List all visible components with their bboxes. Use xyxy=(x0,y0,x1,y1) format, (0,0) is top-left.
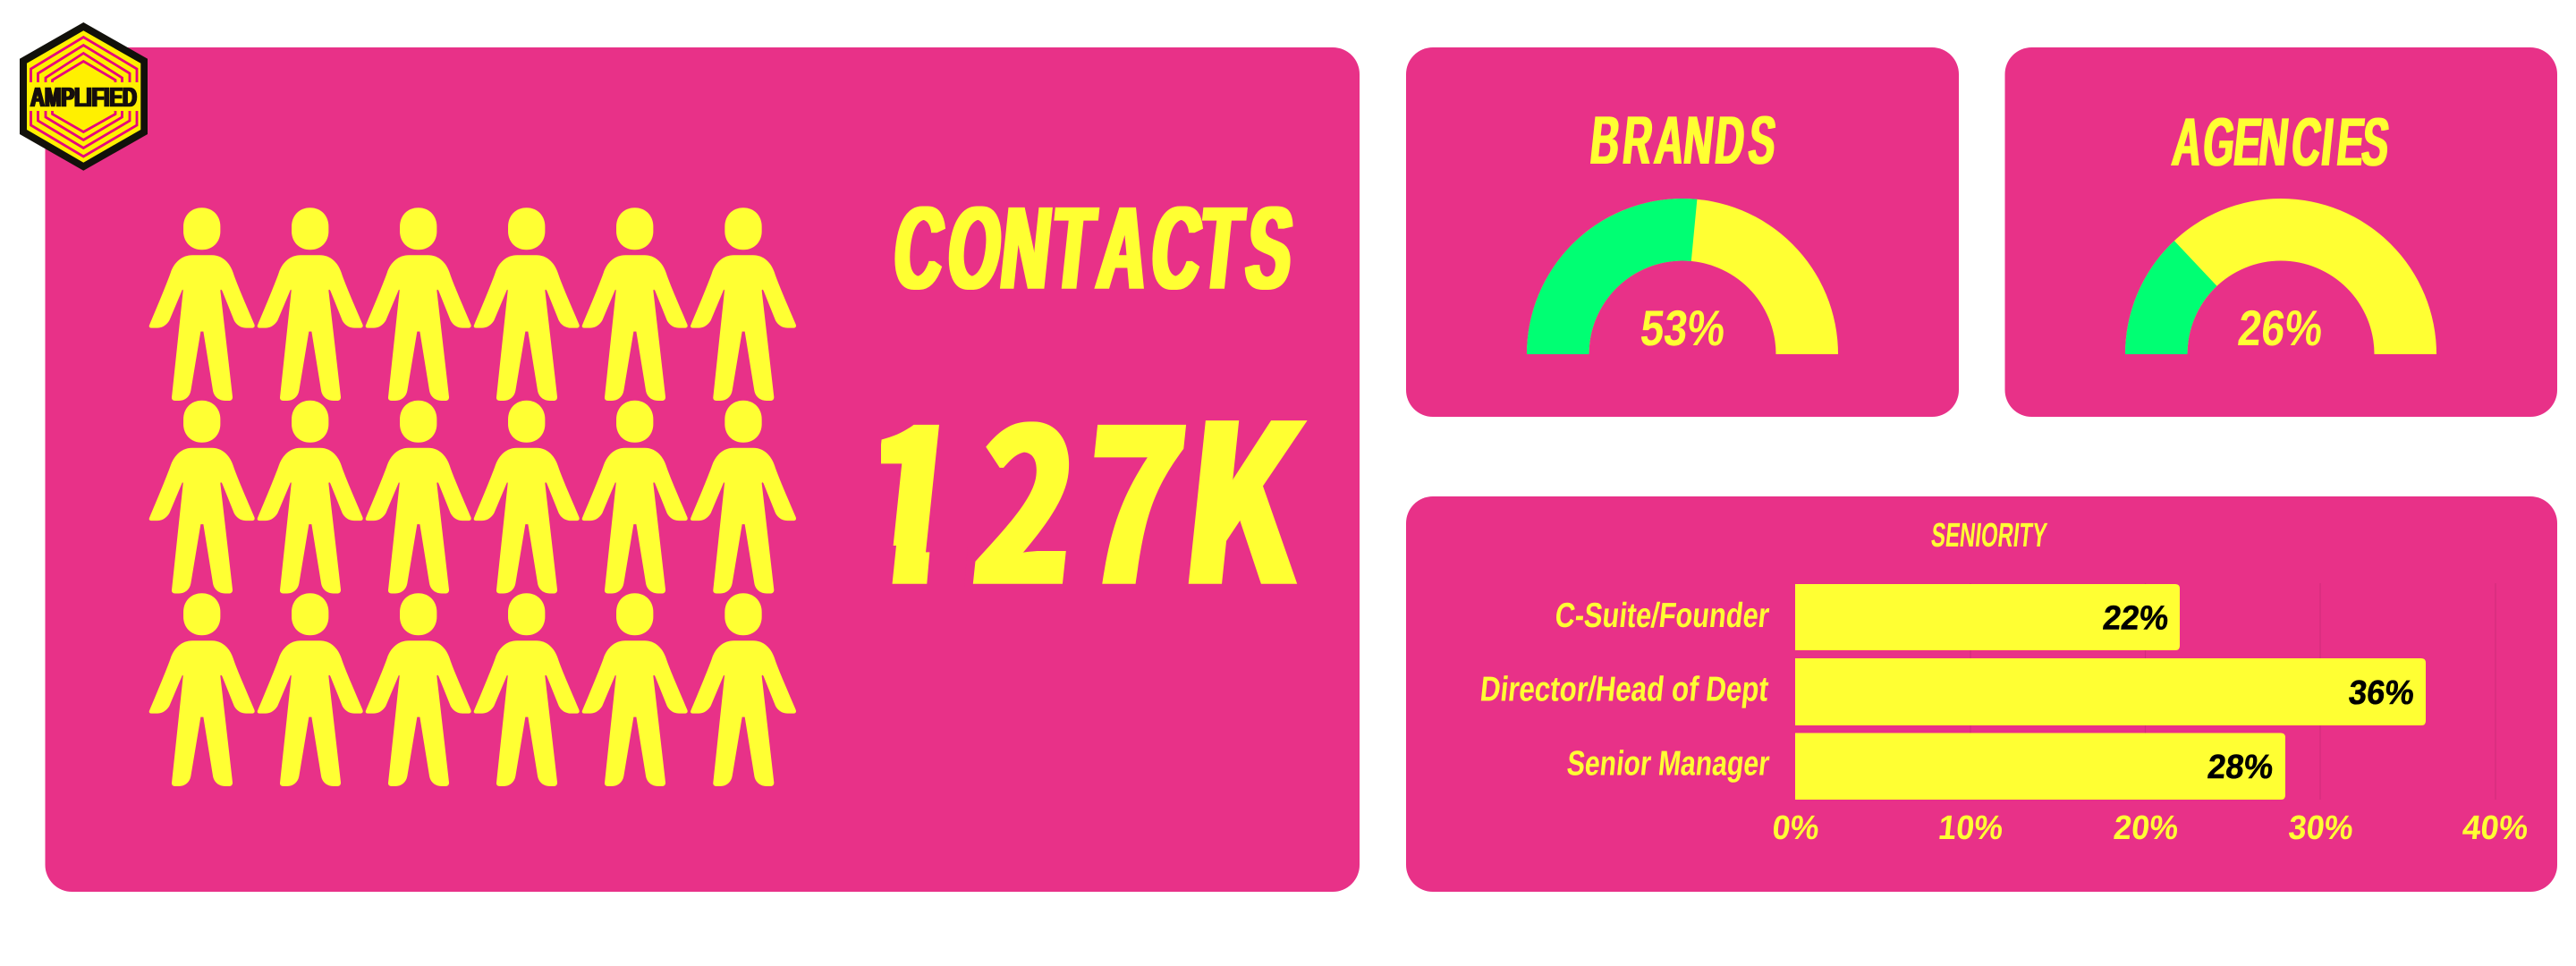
gauge: agencies 26% xyxy=(2125,199,2436,354)
axis tick labels xyxy=(1770,809,2529,847)
panel: agencies xyxy=(2005,47,2557,417)
bar: director 36% xyxy=(1795,658,2426,725)
value label: 36%: 36% xyxy=(2347,674,2416,712)
axis tick labels: 10% xyxy=(1936,809,2004,847)
bar: senior manager 28% xyxy=(1795,733,2285,800)
panel background xyxy=(1406,47,1959,417)
panel background xyxy=(45,47,1360,892)
gauge: brands 53% xyxy=(1527,199,1838,354)
gauge value: 53%: 53% xyxy=(1638,300,1728,356)
category label: c-suite: C-Suite/Founder xyxy=(1554,597,1771,635)
category label: senior manager: Senior Manager xyxy=(1565,745,1771,783)
bar: c-suite 22% xyxy=(1795,584,2180,650)
badge inner hexagon xyxy=(27,30,140,163)
axis tick labels: 0% xyxy=(1770,809,1821,847)
panel: seniority xyxy=(1406,496,2557,892)
badge outer hexagon xyxy=(20,22,148,171)
heading: agencies: AGENCIES xyxy=(2169,105,2393,181)
panel background xyxy=(2005,47,2557,417)
axis tick labels: 20% xyxy=(2112,809,2180,847)
gauge value: 26%: 26% xyxy=(2235,300,2326,356)
logo: amplified badge xyxy=(20,22,148,171)
heading: brands: BRANDS xyxy=(1587,103,1780,179)
panel: contacts xyxy=(45,47,1360,892)
axis tick labels: 40% xyxy=(2461,809,2529,847)
panel background xyxy=(1406,496,2557,892)
icon grid: 18 people xyxy=(149,208,796,786)
badge chevron lines xyxy=(30,38,137,157)
bar chart: seniority xyxy=(1479,583,2529,847)
axis tick labels: 30% xyxy=(2287,809,2355,847)
category label: director: Director/Head of Dept xyxy=(1479,671,1770,708)
value label: 28%: 28% xyxy=(2206,749,2275,786)
badge wordmark: AMPLIFIED xyxy=(30,81,137,113)
heading: seniority: SENIORITY xyxy=(1929,517,2048,555)
heading: contacts: CONTACTS xyxy=(888,182,1299,314)
panel: brands xyxy=(1406,47,1959,417)
big number: 127K: 127K xyxy=(845,330,1322,647)
value label: 22%: 22% xyxy=(2101,600,2170,637)
